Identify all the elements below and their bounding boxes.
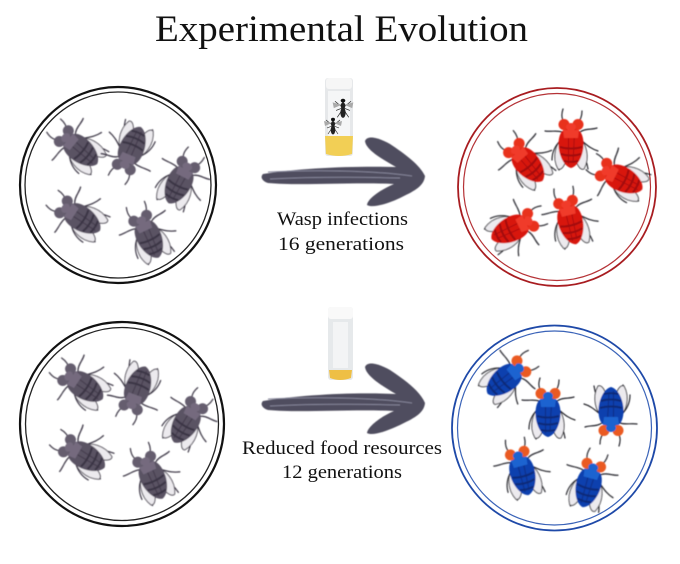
label: wasp infections <box>277 209 408 255</box>
arrow: top <box>262 137 425 206</box>
fly 3 <box>584 385 637 446</box>
fly 2 <box>93 115 165 191</box>
fly 2 <box>545 109 598 170</box>
label: reduced food resources: 12 generations <box>282 462 402 483</box>
fly 4 <box>36 176 116 254</box>
fly 1 <box>484 119 564 199</box>
label: reduced food resources: Reduced food resources <box>242 438 442 459</box>
fly 5 <box>557 443 624 516</box>
fly 5 <box>114 434 188 511</box>
icon: wasp lower <box>324 118 342 134</box>
fly 1 <box>470 336 550 416</box>
fly 4 <box>488 431 555 504</box>
fly 1 <box>39 344 119 422</box>
panel: ancestral flies, top <box>20 87 219 283</box>
fly 1 <box>35 105 116 185</box>
arrow: bottom <box>262 363 425 434</box>
title: Experimental Evolution <box>155 9 528 50</box>
fly 4 <box>41 415 120 491</box>
fly 3 <box>578 139 656 213</box>
icon: food vial <box>328 307 353 380</box>
fly 2 <box>100 355 171 431</box>
panel: red evolved flies <box>458 88 656 286</box>
panel: ancestral flies, bottom <box>20 322 228 526</box>
fly 3 <box>145 139 219 217</box>
panel: blue evolved flies <box>452 326 657 530</box>
icon: wasp upper <box>333 99 353 118</box>
label: reduced food resources <box>242 438 442 483</box>
fly 3 <box>151 378 228 458</box>
fly 5 <box>537 180 603 252</box>
fly 2 <box>522 378 575 439</box>
icon: wasp vial <box>324 78 353 156</box>
label: wasp infections: Wasp infections <box>277 209 408 230</box>
fly 4 <box>478 190 556 264</box>
fly 5 <box>110 193 184 270</box>
label: wasp infections: 16 generations <box>278 234 404 255</box>
